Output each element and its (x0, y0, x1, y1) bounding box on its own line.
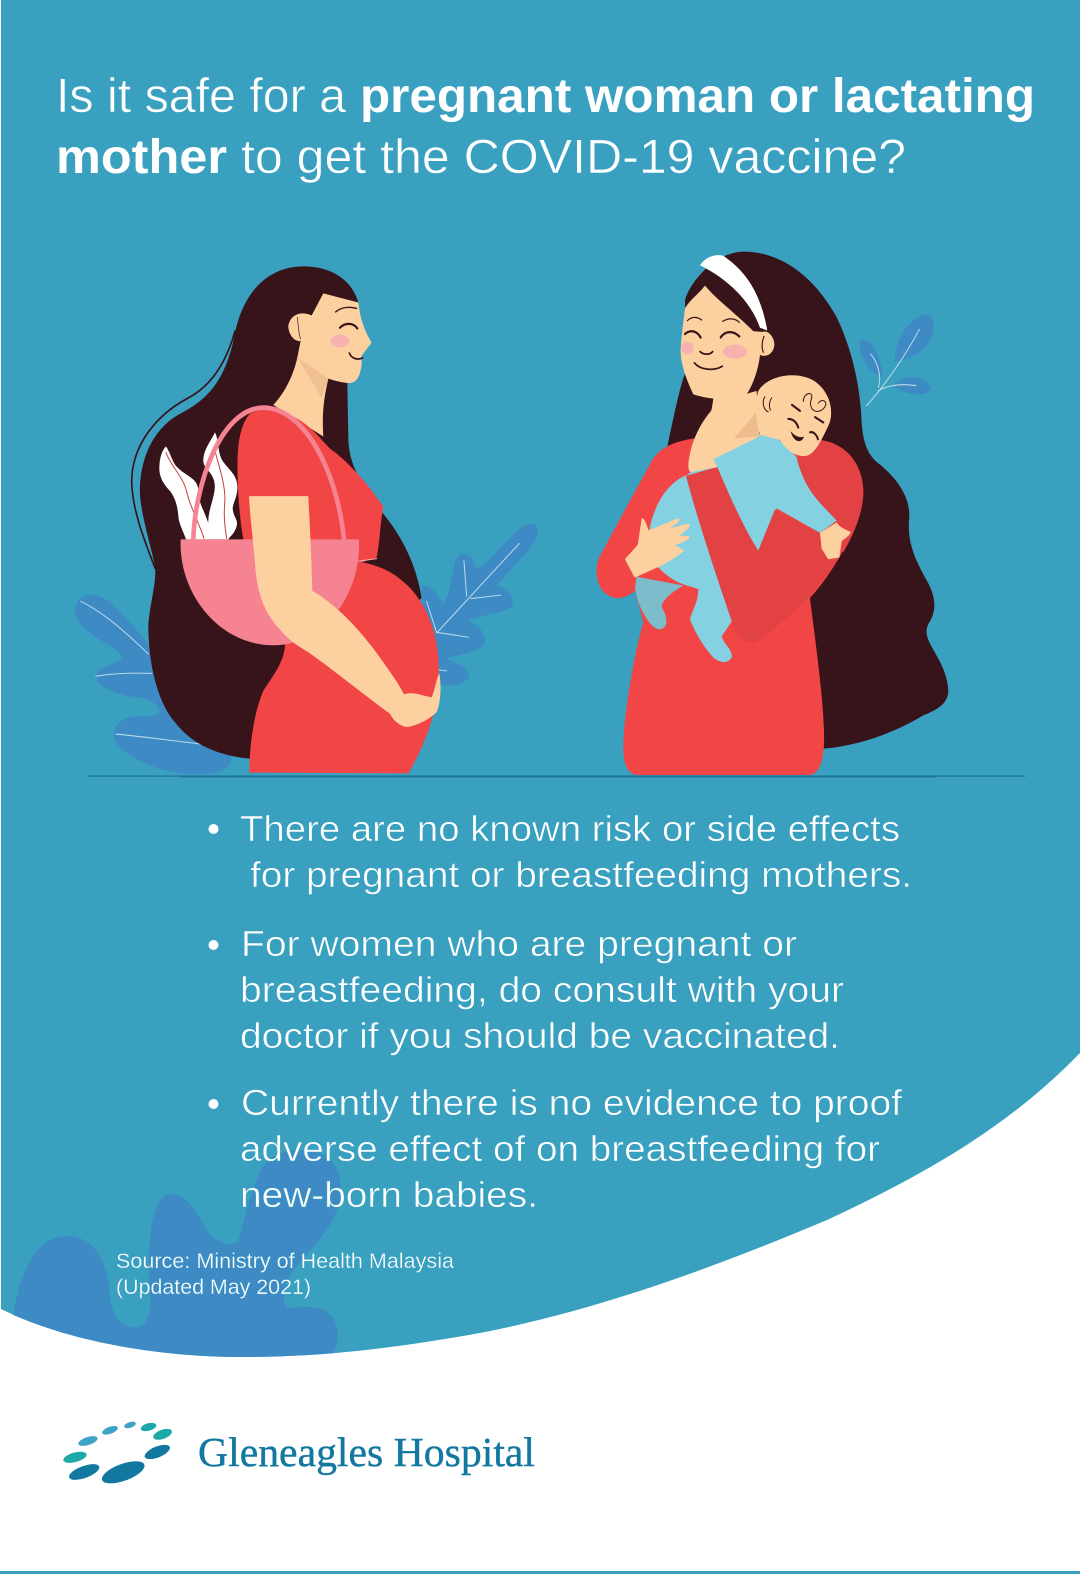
title: Is it safe for a (56, 70, 346, 123)
ground line (88, 776, 1025, 778)
left leaf (75, 595, 231, 774)
belly and lower dress (249, 561, 439, 773)
small leaf (859, 315, 934, 406)
dress top (237, 410, 383, 563)
baby head (756, 375, 831, 456)
white plants in bag (159, 432, 237, 539)
bullet 2: breastfeeding, do consult with your (240, 969, 844, 1010)
mother forearm (686, 467, 840, 643)
bullet 3: new-born babies. (240, 1174, 538, 1215)
bullet 3: Currently there is no evidence to proof (241, 1082, 903, 1123)
bag handle (193, 408, 344, 539)
bottom rule (0, 1571, 1080, 1574)
source note (116, 1250, 454, 1299)
bullet 2 (208, 923, 844, 1056)
waist seam (359, 559, 377, 561)
illustration: mother with baby (597, 252, 948, 775)
bullet 1 (208, 808, 912, 895)
baby hand (820, 522, 851, 559)
decorative leaf blob (0, 1150, 341, 1367)
face and neck (681, 286, 774, 440)
illustration: pregnant woman (75, 266, 538, 774)
bag (181, 539, 359, 645)
far shoulder (797, 440, 863, 552)
logo mark (62, 1420, 173, 1488)
headband (700, 255, 767, 331)
baby back leg (635, 577, 683, 629)
title: mother (56, 131, 227, 184)
title (56, 70, 1035, 184)
face and neck (273, 293, 372, 437)
right leaf (422, 523, 538, 685)
bullet 3 (208, 1082, 903, 1215)
source note: (Updated May 2021) (116, 1276, 311, 1299)
dress (597, 438, 863, 775)
long hair (132, 266, 422, 759)
source note: Source: Ministry of Health Malaysia (116, 1250, 454, 1273)
title: to get the COVID-19 vaccine? (241, 131, 906, 184)
bullet list (208, 808, 912, 1215)
title: pregnant woman or lactating (360, 70, 1035, 123)
bullet 1: for pregnant or breastfeeding mothers. (250, 854, 912, 895)
logo wordmark: Gleneagles Hospital (198, 1429, 535, 1475)
bullet 3: adverse effect of on breastfeeding for (240, 1128, 880, 1169)
mother shoulder skin (688, 391, 759, 472)
bullet 2: For women who are pregnant or (241, 923, 797, 964)
baby body (648, 434, 837, 662)
long hair (667, 252, 948, 749)
bullet 1: There are no known risk or side effects (240, 808, 900, 849)
arm (249, 496, 441, 727)
mother hand (626, 519, 689, 577)
bullet 2: doctor if you should be vaccinated. (240, 1015, 840, 1056)
